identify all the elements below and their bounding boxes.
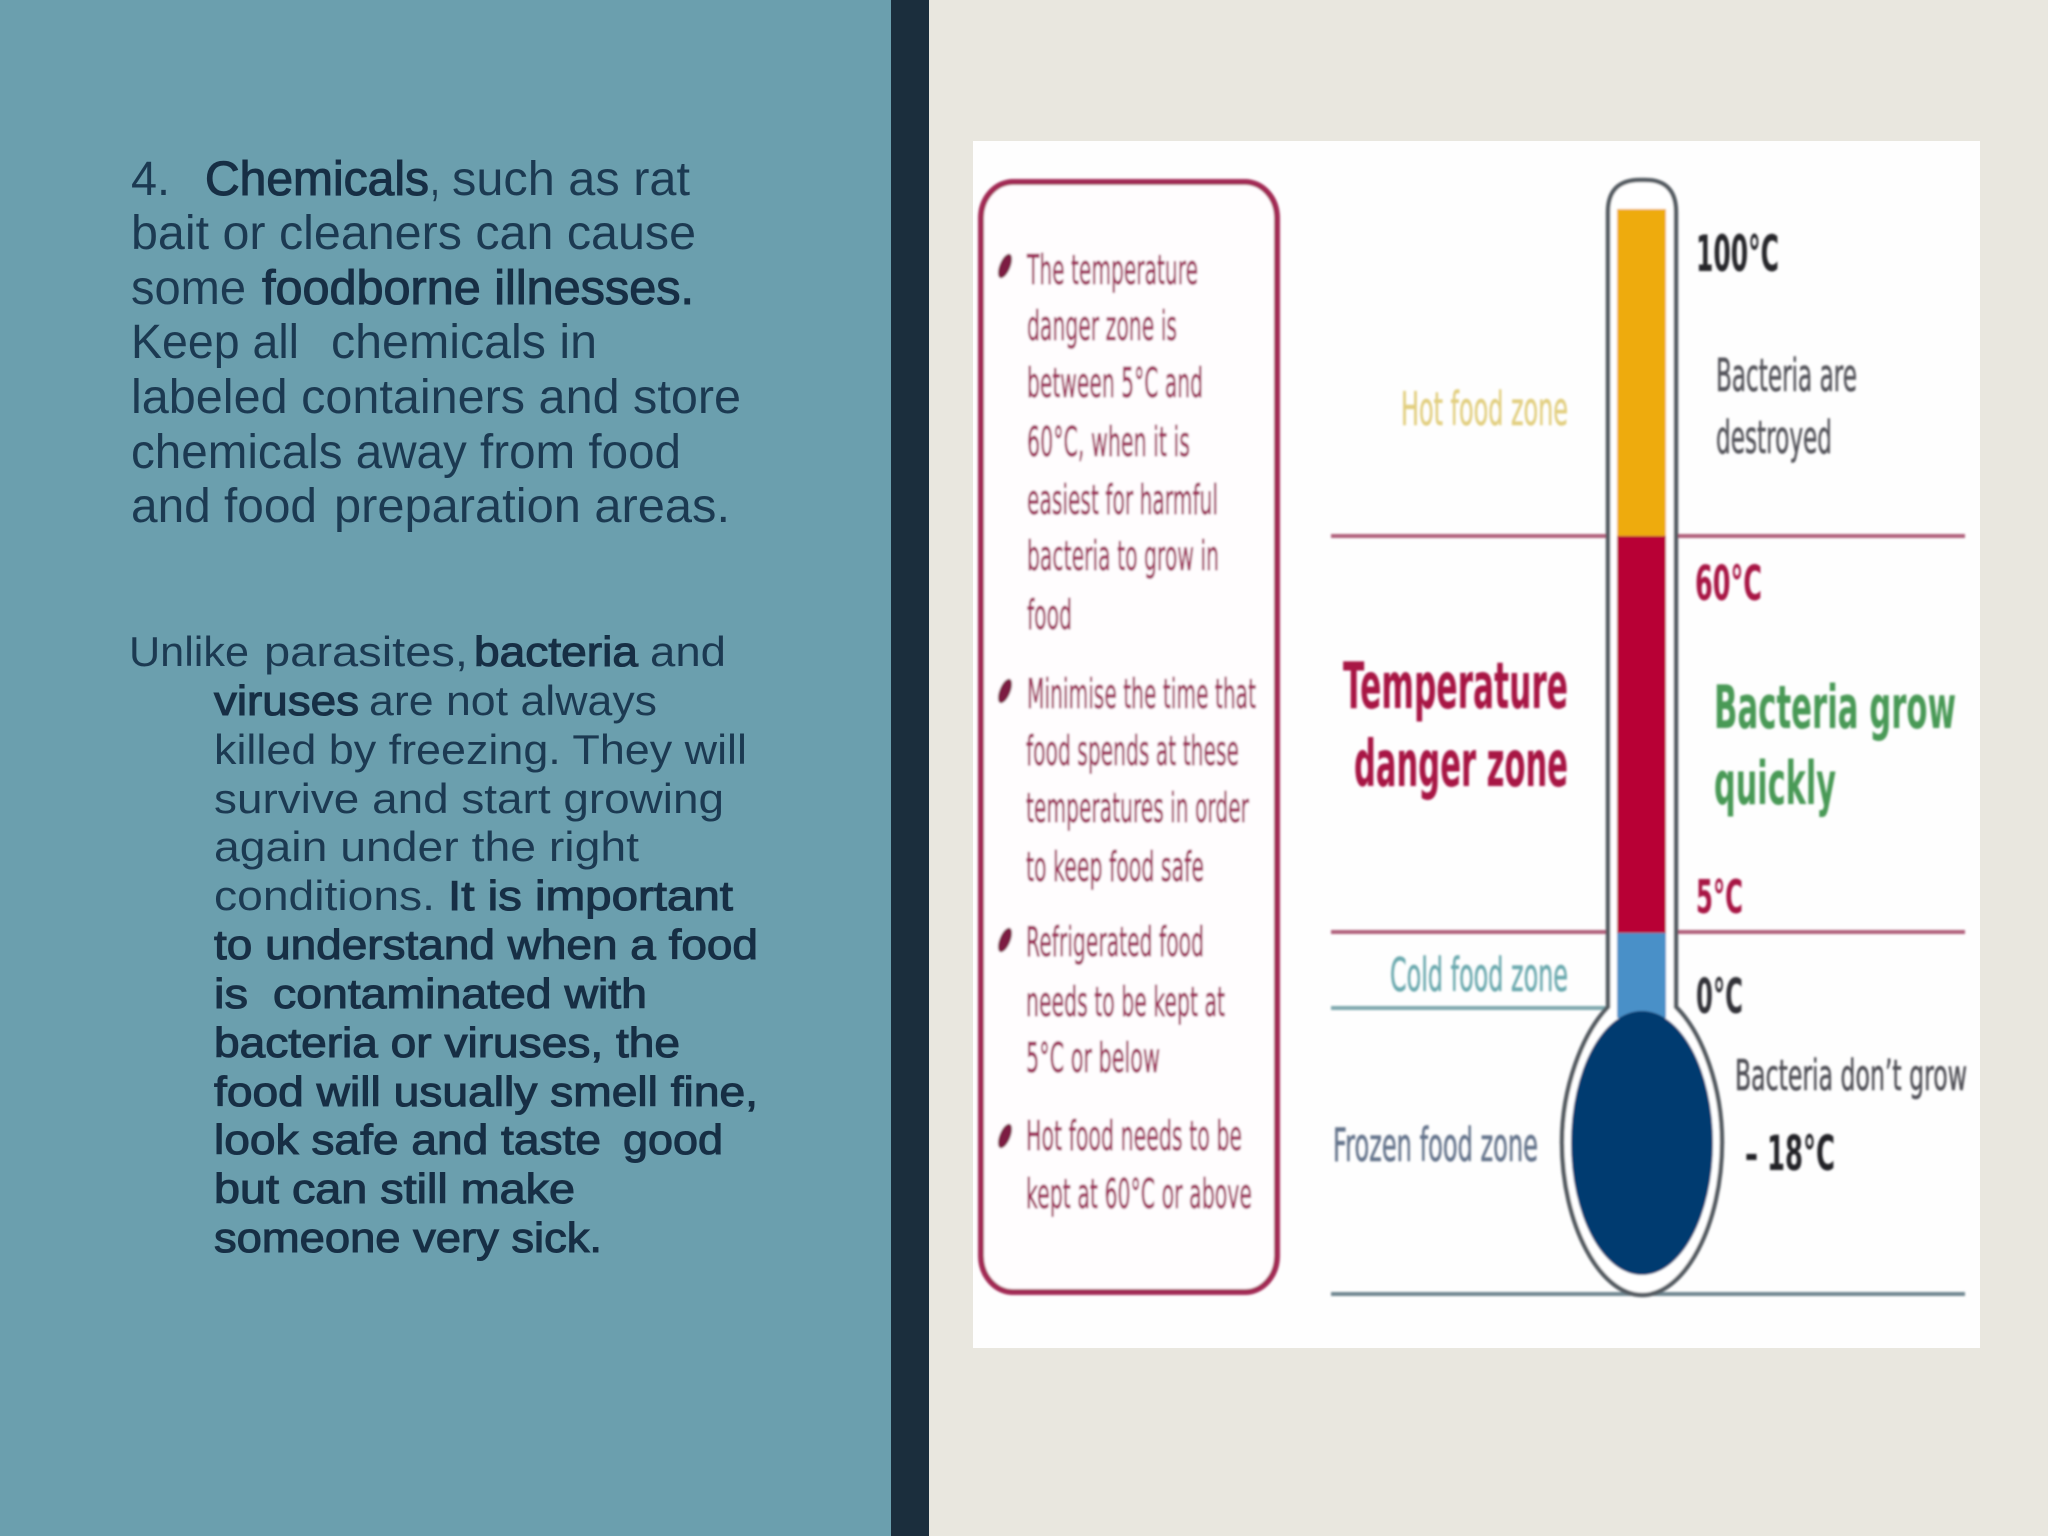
label: temperature danger zone	[1343, 650, 1568, 802]
text block: bacteria and viruses paragraph: someone very sick.	[214, 1214, 602, 1261]
text block: bacteria and viruses paragraph: food will usually smell fine,	[214, 1068, 758, 1115]
label: bacteria grow quickly	[1714, 673, 1956, 819]
temperature chart	[981, 180, 1967, 1295]
temperature chart: danger zone	[1354, 728, 1568, 802]
bullet: danger zone definition: danger zone is	[1027, 302, 1177, 350]
text block: bacteria and viruses paragraph	[129, 628, 758, 1261]
bullet: danger zone definition: 60°C, when it is	[1027, 418, 1190, 466]
temperature chart: easiest for harmful	[1027, 476, 1218, 524]
label: 60°C: 60°C	[1695, 556, 1762, 612]
text block: bacteria and viruses paragraph: Unlike	[129, 628, 249, 675]
bullet: danger zone definition	[995, 246, 1219, 639]
text block: bacteria and viruses paragraph: good	[623, 1116, 723, 1163]
dark vertical band	[891, 0, 929, 1536]
bullet: refrigerated food: 5°C or below	[1026, 1034, 1160, 1082]
text block: chemicals paragraph: such as rat	[452, 153, 690, 206]
text block: chemicals paragraph: bait or cleaners can cause	[131, 207, 696, 260]
text block: chemicals paragraph	[131, 153, 741, 533]
bullet: hot food	[995, 1112, 1252, 1218]
label: 0°C: 0°C	[1696, 969, 1743, 1025]
text block: bacteria and viruses paragraph: survive and start growing	[214, 775, 724, 822]
label: bacteria are destroyed: destroyed	[1716, 411, 1832, 464]
text block: bacteria and viruses paragraph: bacteria or viruses, the	[214, 1019, 680, 1066]
text block: bacteria and viruses paragraph: again under the right	[214, 823, 639, 870]
bullet: minimise time: food spends at these	[1026, 727, 1239, 775]
bullet: minimise time: to keep food safe	[1026, 843, 1204, 891]
text block: bacteria and viruses paragraph: is	[214, 970, 248, 1017]
label: bacteria are destroyed: Bacteria are	[1716, 349, 1857, 402]
panel: white temperature chart image	[973, 141, 1980, 1348]
text block: bacteria and viruses paragraph: to understand when a food	[214, 921, 758, 968]
text block: chemicals paragraph: chemicals in	[331, 316, 597, 369]
text block: bacteria and viruses paragraph: viruses	[214, 677, 359, 724]
text block: chemicals paragraph: Chemicals	[205, 153, 429, 206]
temperature chart: Minimise the time that	[1027, 670, 1256, 718]
label: 5°C: 5°C	[1696, 870, 1743, 924]
text block: chemicals paragraph: some	[131, 262, 246, 315]
text block: chemicals paragraph: chemicals away from food	[131, 426, 681, 479]
bullet: danger zone definition: food	[1027, 591, 1072, 639]
bullet: danger zone definition: The temperature	[1027, 246, 1198, 294]
bullet: minimise time: temperatures in order	[1026, 784, 1249, 832]
text block: bacteria and viruses paragraph: contaminated with	[273, 970, 647, 1017]
text block: bacteria and viruses paragraph: and	[650, 628, 726, 675]
text block: chemicals paragraph: ,	[430, 153, 440, 206]
bullet: minimise time	[995, 670, 1256, 891]
callout box outline	[981, 182, 1277, 1292]
temperature chart: Temperature	[1343, 650, 1568, 724]
temperature chart: bacteria to grow in	[1027, 532, 1219, 580]
text block: bacteria and viruses paragraph: killed by freezing. They will	[214, 726, 747, 773]
bullet: refrigerated food: Refrigerated food	[1026, 918, 1204, 966]
text block: bacteria and viruses paragraph: conditions.	[214, 872, 435, 919]
text block: chemicals paragraph: preparation areas.	[334, 480, 730, 533]
label: bacteria grow quickly: quickly	[1714, 749, 1836, 819]
text block: chemicals paragraph: 4.	[131, 153, 170, 206]
text block: bacteria and viruses paragraph: are not always	[369, 677, 657, 724]
bullet: hot food: Hot food needs to be	[1026, 1112, 1242, 1160]
text block: chemicals paragraph: Keep all	[131, 316, 299, 369]
label: minus 18°C: – 18°C	[1745, 1126, 1835, 1182]
label: cold food zone: Cold food zone	[1390, 948, 1568, 1002]
temperature chart: 100°C	[1696, 225, 1779, 283]
bullet: refrigerated food	[995, 918, 1225, 1082]
text block: bacteria and viruses paragraph: It is important	[448, 872, 733, 919]
thermometer	[1562, 180, 1722, 1295]
text block: bacteria and viruses paragraph: but can still make	[214, 1165, 575, 1212]
bullet: danger zone definition: between 5°C and	[1027, 359, 1203, 407]
label: bacteria are destroyed	[1716, 349, 1857, 464]
text block: bacteria and viruses paragraph: bacteria	[474, 628, 639, 675]
text block: bacteria and viruses paragraph: look safe and taste	[214, 1116, 601, 1163]
text block: bacteria and viruses paragraph: parasites,	[264, 628, 468, 675]
zone divider lines	[1331, 536, 1965, 1294]
bullet: hot food: kept at 60°C or above	[1026, 1170, 1252, 1218]
temperature chart: needs to be kept at	[1026, 978, 1225, 1026]
panel: left teal column	[0, 0, 891, 1536]
text block: chemicals paragraph: and food	[131, 480, 317, 533]
text block: chemicals paragraph: labeled containers and store	[131, 371, 741, 424]
label: hot food zone: Hot food zone	[1401, 382, 1568, 436]
label: frozen food zone: Frozen food zone	[1333, 1118, 1538, 1172]
text block: chemicals paragraph: foodborne illnesses.	[262, 262, 694, 315]
